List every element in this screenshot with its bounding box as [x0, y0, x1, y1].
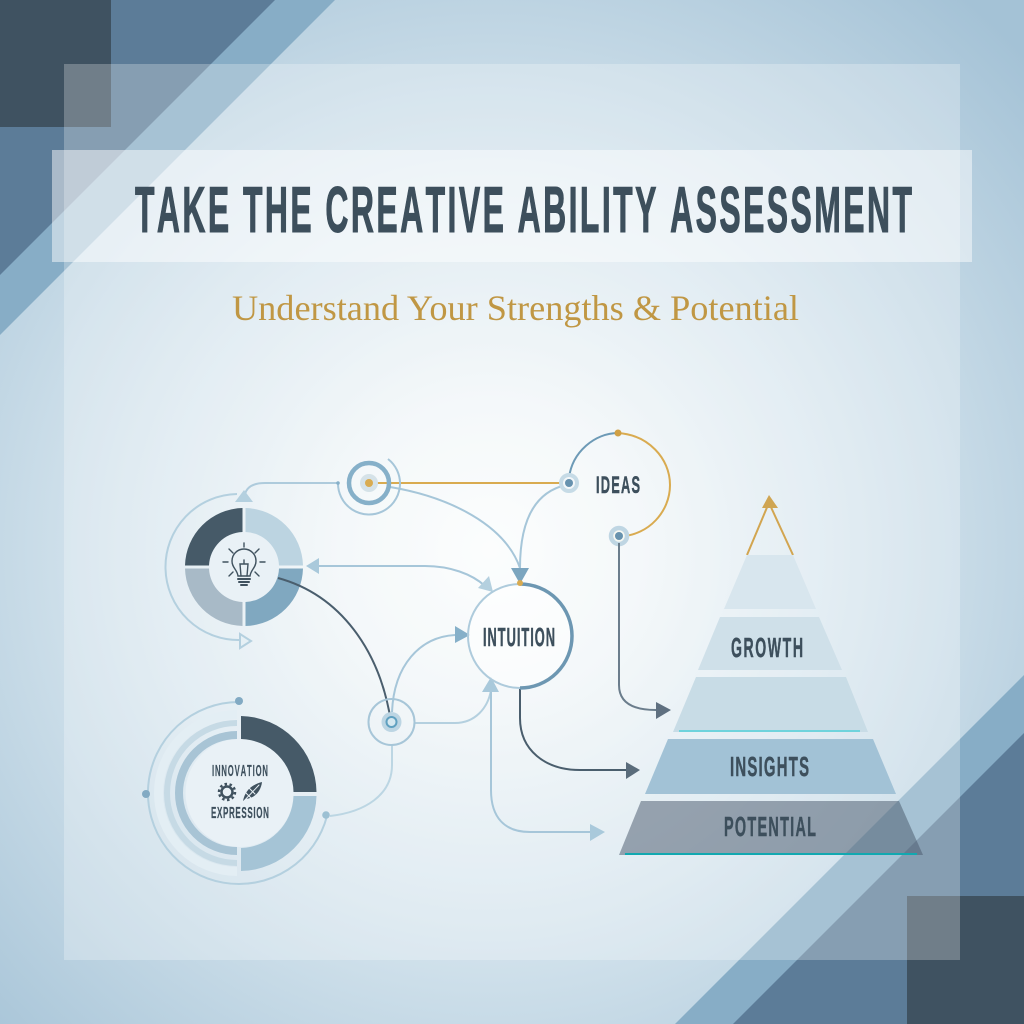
label: ideas: IDEAS: [596, 473, 640, 499]
connector: target to top of bulb ring: [235, 483, 338, 502]
label: innovation: INNOVATION: [212, 762, 268, 780]
subtitle: Understand Your Strengths & Potential: [232, 288, 799, 328]
connector: intuition to insights: [520, 687, 640, 779]
tier: growth: [698, 617, 842, 670]
connector: node to intuition bottom curve: [415, 690, 491, 723]
node: ideas bottom: [611, 528, 627, 544]
icon: lightbulb: [223, 543, 265, 585]
connector: ideas to pyramid: [619, 543, 671, 719]
tier: insights: INSIGHTS: [730, 751, 809, 782]
tier: top: [724, 555, 816, 609]
connector: target to intuition: [390, 487, 520, 568]
node: ideas left: [561, 475, 577, 491]
icon: gear: [219, 784, 235, 800]
node: target: [336, 459, 400, 514]
tier: growth: GROWTH: [731, 632, 803, 663]
connector: gold line target to ideas: [369, 482, 565, 484]
connector: bulb ring to intuition: [306, 558, 493, 592]
connector: intuition to pyramid base: [482, 677, 605, 841]
label: intuition: INTUITION: [483, 623, 555, 652]
pyramid: [619, 495, 923, 855]
tier: potential: [619, 801, 923, 855]
tier: potential: POTENTIAL: [724, 811, 816, 842]
ideas arc: [561, 430, 670, 544]
apex arrow: [747, 495, 793, 555]
icon: feather: [243, 782, 262, 802]
tier: insights: [645, 739, 896, 794]
donut chart: lightbulb: [165, 494, 303, 648]
label: expression: EXPRESSION: [211, 804, 269, 822]
title banner: [52, 150, 972, 262]
connector: ideas node to intuition: [520, 485, 566, 568]
node: intuition: [468, 580, 572, 688]
tier: middle: [673, 677, 868, 732]
node: junction: [368, 699, 414, 745]
title: TAKE THE CREATIVE ABILITY ASSESSMENT: [135, 174, 912, 246]
connector: dark curve bulb to node: [278, 578, 391, 722]
translucent panel: [64, 64, 960, 960]
donut chart: innovation and expression: [142, 697, 330, 884]
arrow: into intuition top: [511, 568, 529, 584]
connector: node to intuition top curve: [392, 626, 470, 712]
connector: donut to node: [330, 744, 392, 816]
